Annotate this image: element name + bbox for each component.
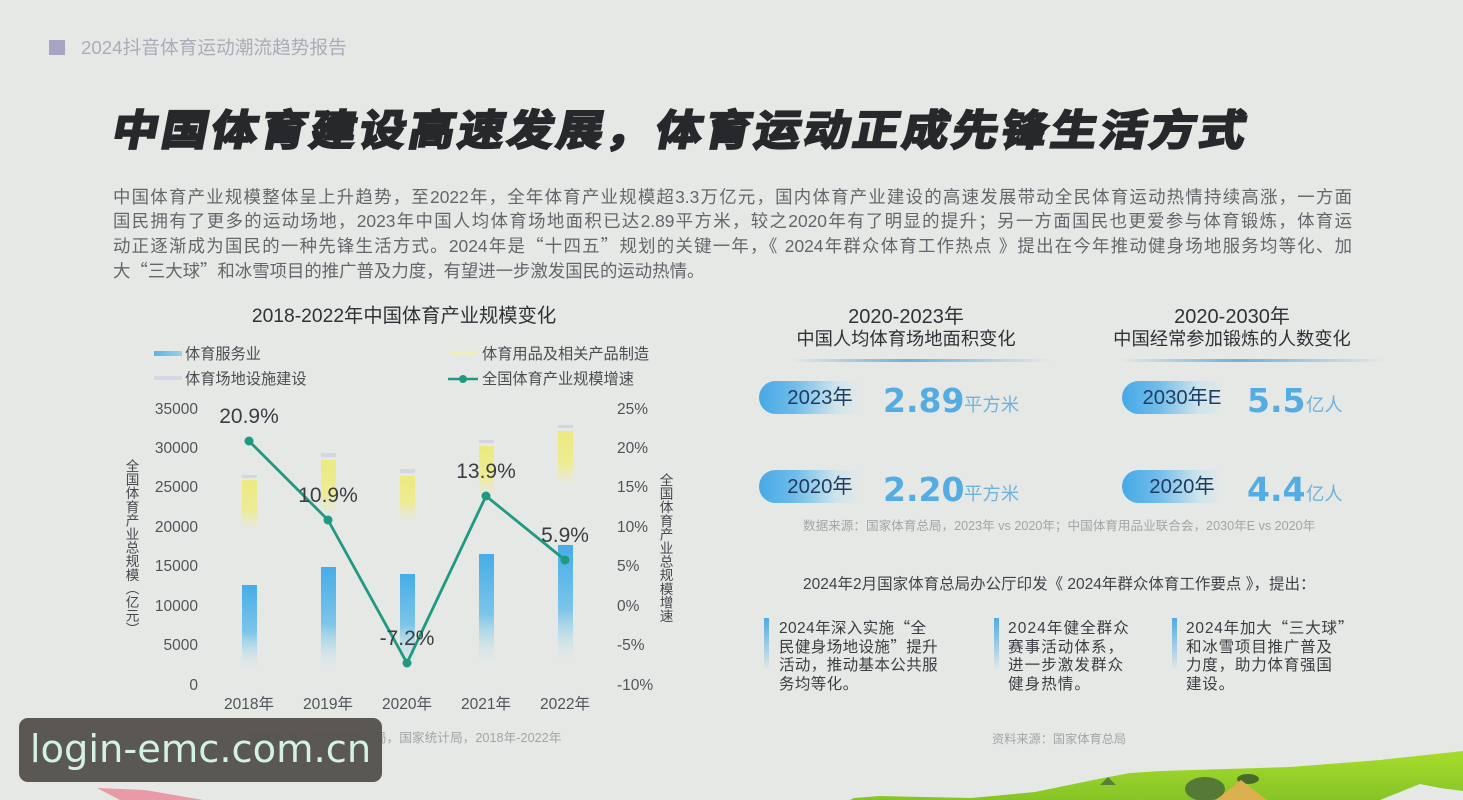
stat pill label 2023: 2023年 <box>787 387 853 409</box>
policy item 1 marker <box>764 618 769 670</box>
policy item 2: 健身热情。 <box>1008 676 1091 693</box>
title: 中国体育建设高速发展，体育运动正成先锋生活方式 <box>109 107 1254 154</box>
policy item 1: 活动，推动基本公共服 <box>779 657 938 674</box>
policy item 3 <box>1186 616 1354 693</box>
stat value 2.20: 2.20 <box>883 470 964 509</box>
left axis labels: 15000 <box>155 558 198 575</box>
x axis labels: 2018年 <box>224 695 274 713</box>
policy item 3: 建设。 <box>1186 676 1235 693</box>
heading rule <box>790 359 1052 362</box>
stat unit: 平方米 <box>964 483 1019 504</box>
growth value labels: 13.9% <box>456 460 516 483</box>
panel heading: venue area: 中国人均体育场地面积变化 <box>796 328 1016 349</box>
growth value labels: -7.2% <box>380 627 434 650</box>
left axis labels: 10000 <box>155 598 198 615</box>
right axis labels: 0% <box>617 598 640 615</box>
chart source: 数据来源：国家体育总局，国家统计局，2018年-2022年 <box>247 731 561 745</box>
intro paragraph: 中国体育产业规模整体呈上升趋势，至2022年，全年体育产业规模超3.3万亿元，国内体育产业建设的高速发展带动全民体育运动热情持续高涨，一方面 <box>113 187 1352 207</box>
report tag square icon <box>49 40 65 55</box>
legend: 体育服务业 <box>185 346 261 363</box>
policy source: 资料来源：国家体育总局 <box>992 732 1126 746</box>
stat pill label 2020: 2020年 <box>1149 476 1215 498</box>
right axis labels <box>617 401 653 694</box>
policy item 2: 2024年健全群众 <box>1008 620 1130 637</box>
watermark <box>19 718 382 782</box>
right axis labels: -10% <box>617 677 653 694</box>
bars: sports goods <box>242 431 573 530</box>
right axis labels: -5% <box>617 637 645 654</box>
x axis labels: 2022年 <box>540 695 590 713</box>
stat pill label 2030E: 2030年E <box>1143 387 1221 409</box>
policy item 1: 务均等化。 <box>779 676 859 693</box>
panel heading: exercise population: 中国经常参加锻炼的人数变化 <box>1113 328 1351 349</box>
policy item 3: 力度，助力体育强国 <box>1186 657 1333 674</box>
left axis labels: 5000 <box>164 637 198 654</box>
left axis labels <box>155 401 198 694</box>
x axis labels: 2019年 <box>303 695 353 713</box>
stat unit: 亿人 <box>1306 394 1343 415</box>
growth value labels <box>219 405 589 650</box>
right axis labels: 5% <box>617 558 640 575</box>
bars: sports services <box>242 545 573 670</box>
policy intro: 2024年2月国家体育总局办公厅印发《 2024年群众体育工作要点 》，提出： <box>803 576 1315 593</box>
policy item 2: 进一步激发群众 <box>1008 657 1124 674</box>
growth line <box>244 436 570 668</box>
intro paragraph: 大“三大球”和冰雪项目的推广普及力度，有望进一步激发国民的运动热情。 <box>113 258 704 283</box>
policy item 1: 民健身场地设施”提升 <box>779 635 938 657</box>
legend: 体育场地设施建设 <box>185 371 306 388</box>
panel heading: venue area <box>796 306 1016 349</box>
left axis labels: 20000 <box>155 519 198 536</box>
left axis labels: 0 <box>189 677 198 694</box>
legend <box>154 346 649 388</box>
legend: 全国体育产业规模增速 <box>482 370 634 388</box>
left axis title: 全国体育产业总规模（亿元） <box>124 459 139 636</box>
stat unit: 平方米 <box>964 394 1019 415</box>
right axis title: 全国体育产业总规模增速 <box>658 473 673 623</box>
stat unit: 亿人 <box>1306 483 1343 504</box>
policy item 3: 和冰雪项目推广普及 <box>1186 639 1333 656</box>
intro paragraph: 动正逐渐成为国民的一种先锋生活方式。2024年是“十四五”规划的关键一年，《 2024年群众体育工作热点 》提出在今年推动健身场地服务均等化、加 <box>113 233 1352 258</box>
growth value labels: 10.9% <box>298 484 358 507</box>
watermark: login-emc.com.cn <box>30 727 371 772</box>
panel heading: exercise population: 2020-2030年 <box>1174 306 1290 328</box>
legend: 体育用品及相关产品制造 <box>482 346 649 363</box>
landscape: green hill with tent <box>850 751 1463 800</box>
growth value labels: 5.9% <box>541 524 589 547</box>
right axis labels: 20% <box>617 440 648 457</box>
bars: venue construction <box>242 425 573 478</box>
left axis labels: 35000 <box>155 401 198 418</box>
policy item 1 <box>779 616 938 693</box>
stat pill label 2020: 2020年 <box>787 476 853 498</box>
panel heading: venue area: 2020-2023年 <box>848 306 964 328</box>
heading rule <box>1118 359 1386 362</box>
stat pill 2020 <box>759 470 861 503</box>
stat value 4.4: 4.4 <box>1247 470 1305 509</box>
stats source: 数据来源：国家体育总局，2023年 vs 2020年；中国体育用品业联合会，2030年E vs 2020年 <box>803 519 1315 533</box>
report name header: 2024抖音体育运动潮流趋势报告 <box>81 37 347 58</box>
pink ribbon decoration <box>97 788 202 800</box>
x axis labels: 2021年 <box>461 695 511 713</box>
left axis labels: 30000 <box>155 440 198 457</box>
stat pill 2020 <box>1122 470 1224 503</box>
stat value 5.5: 5.5 <box>1247 381 1305 420</box>
right axis labels: 15% <box>617 479 648 496</box>
stat value 2.89: 2.89 <box>883 381 964 420</box>
chart title: 2018-2022年中国体育产业规模变化 <box>252 306 556 327</box>
x axis labels: 2020年 <box>382 695 432 713</box>
intro paragraph <box>113 187 1352 283</box>
stat pill 2023 <box>759 381 861 414</box>
right axis labels: 10% <box>617 519 648 536</box>
policy item 3 marker <box>1172 618 1177 670</box>
panel heading: exercise population <box>1113 306 1351 349</box>
policy item 2 marker <box>994 618 999 670</box>
policy item 2: 赛事活动体系， <box>1008 639 1124 656</box>
policy item 1: 2024年深入实施“全 <box>779 616 926 638</box>
intro paragraph: 国民拥有了更多的运动场地，2023年中国人均体育场地面积已达2.89平方米，较之2020年有了明显的提升；另一方面国民也更爱参与体育锻炼，体育运 <box>113 211 1352 231</box>
policy item 3: 2024年加大“三大球” <box>1186 616 1354 638</box>
x axis labels <box>224 695 590 713</box>
growth value labels: 20.9% <box>219 405 279 428</box>
left axis labels: 25000 <box>155 479 198 496</box>
right axis labels: 25% <box>617 401 648 418</box>
policy item 2 <box>1008 620 1130 693</box>
stat pill 2030E <box>1122 381 1224 414</box>
